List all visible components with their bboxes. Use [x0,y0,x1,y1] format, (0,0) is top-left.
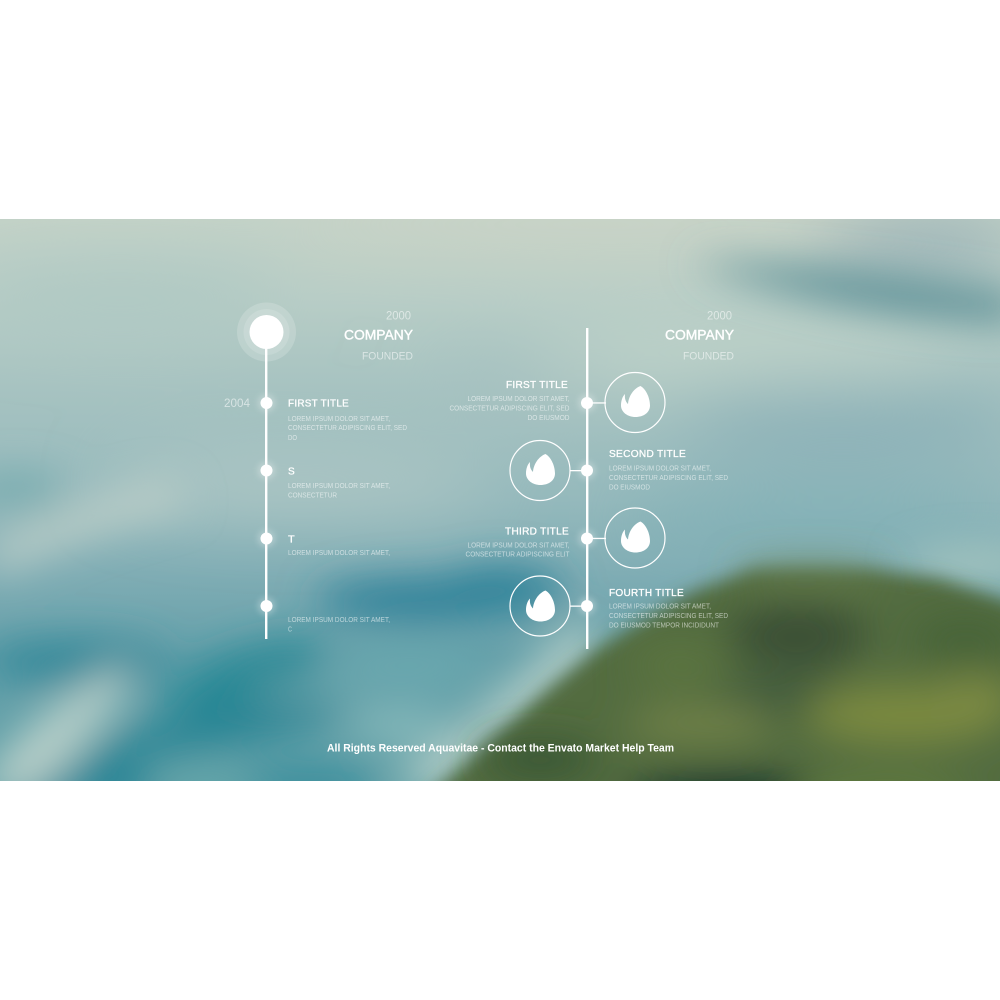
right header: company founded: FOUNDED [683,350,734,362]
year label 2004: 2004 [224,398,251,410]
right item 3 with icon [466,508,665,568]
footer credit: All Rights Reserved Aquavitae - Contact the Envato Market Help Team [327,742,674,754]
start node with halos [237,302,296,362]
left timeline [224,302,414,639]
left header: company founded: 2000 [386,310,411,322]
left item 3: T [288,534,295,546]
right timeline [450,310,735,649]
spine: right timeline [586,328,588,649]
icon: drop in circle [605,372,665,432]
right item 3 with icon: THIRD TITLE [505,526,569,538]
left item 1: LOREM IPSUM DOLOR SIT AMET, [288,416,390,423]
right item 2 with icon: CONSECTETUR ADIPISCING ELIT, SED [609,475,728,482]
right item 1 with icon: LOREM IPSUM DOLOR SIT AMET, [468,396,570,403]
right header: company founded [665,310,735,362]
right item 1 with icon [450,372,665,432]
left item 1: DO [288,435,297,442]
right item 2 with icon: DO EIUSMOD [609,484,650,492]
left header: company founded: COMPANY [344,326,414,342]
left item 1 [258,394,407,442]
left header: company founded [344,310,414,362]
left item 1: CONSECTETUR ADIPISCING ELIT, SED [288,425,407,432]
left item 4 [258,597,390,634]
right item 1 with icon: FIRST TITLE [506,379,568,391]
left header: company founded: FOUNDED [362,350,413,362]
right header: company founded: COMPANY [665,326,735,342]
right item 2 with icon: LOREM IPSUM DOLOR SIT AMET, [609,466,711,472]
left item 3 [258,530,390,557]
left item 2 [258,462,390,500]
blurred landscape photo background [0,207,1000,826]
icon: drop in circle [510,576,570,636]
left item 2: S [288,466,295,478]
right item 3 with icon: CONSECTETUR ADIPISCING ELIT [466,552,570,558]
icon: drop in circle [510,440,570,500]
right item 2 with icon: SECOND TITLE [609,448,686,460]
left item 2: CONSECTETUR [288,492,337,500]
right item 4 with icon: FOURTH TITLE [609,587,684,599]
left item 2: LOREM IPSUM DOLOR SIT AMET, [288,483,390,490]
right item 2 with icon [510,440,728,500]
right item 4 with icon: CONSECTETUR ADIPISCING ELIT, SED [609,613,728,620]
right item 1 with icon: DO EIUSMOD [528,415,570,422]
right item 3 with icon: LOREM IPSUM DOLOR SIT AMET, [468,542,570,550]
spine: left timeline [265,330,267,639]
left item 1: FIRST TITLE [288,398,349,410]
left item 4: C [288,626,292,634]
right item 4 with icon: LOREM IPSUM DOLOR SIT AMET, [609,604,711,610]
right item 4 with icon [510,576,728,636]
left item 4: LOREM IPSUM DOLOR SIT AMET, [288,617,390,624]
right header: company founded: 2000 [707,310,732,322]
left item 3: LOREM IPSUM DOLOR SIT AMET, [288,550,390,557]
right item 1 with icon: CONSECTETUR ADIPISCING ELIT, SED [450,406,570,412]
icon: drop in circle [605,508,665,568]
right item 4 with icon: DO EIUSMOD TEMPOR INCIDIDUNT [609,622,720,630]
